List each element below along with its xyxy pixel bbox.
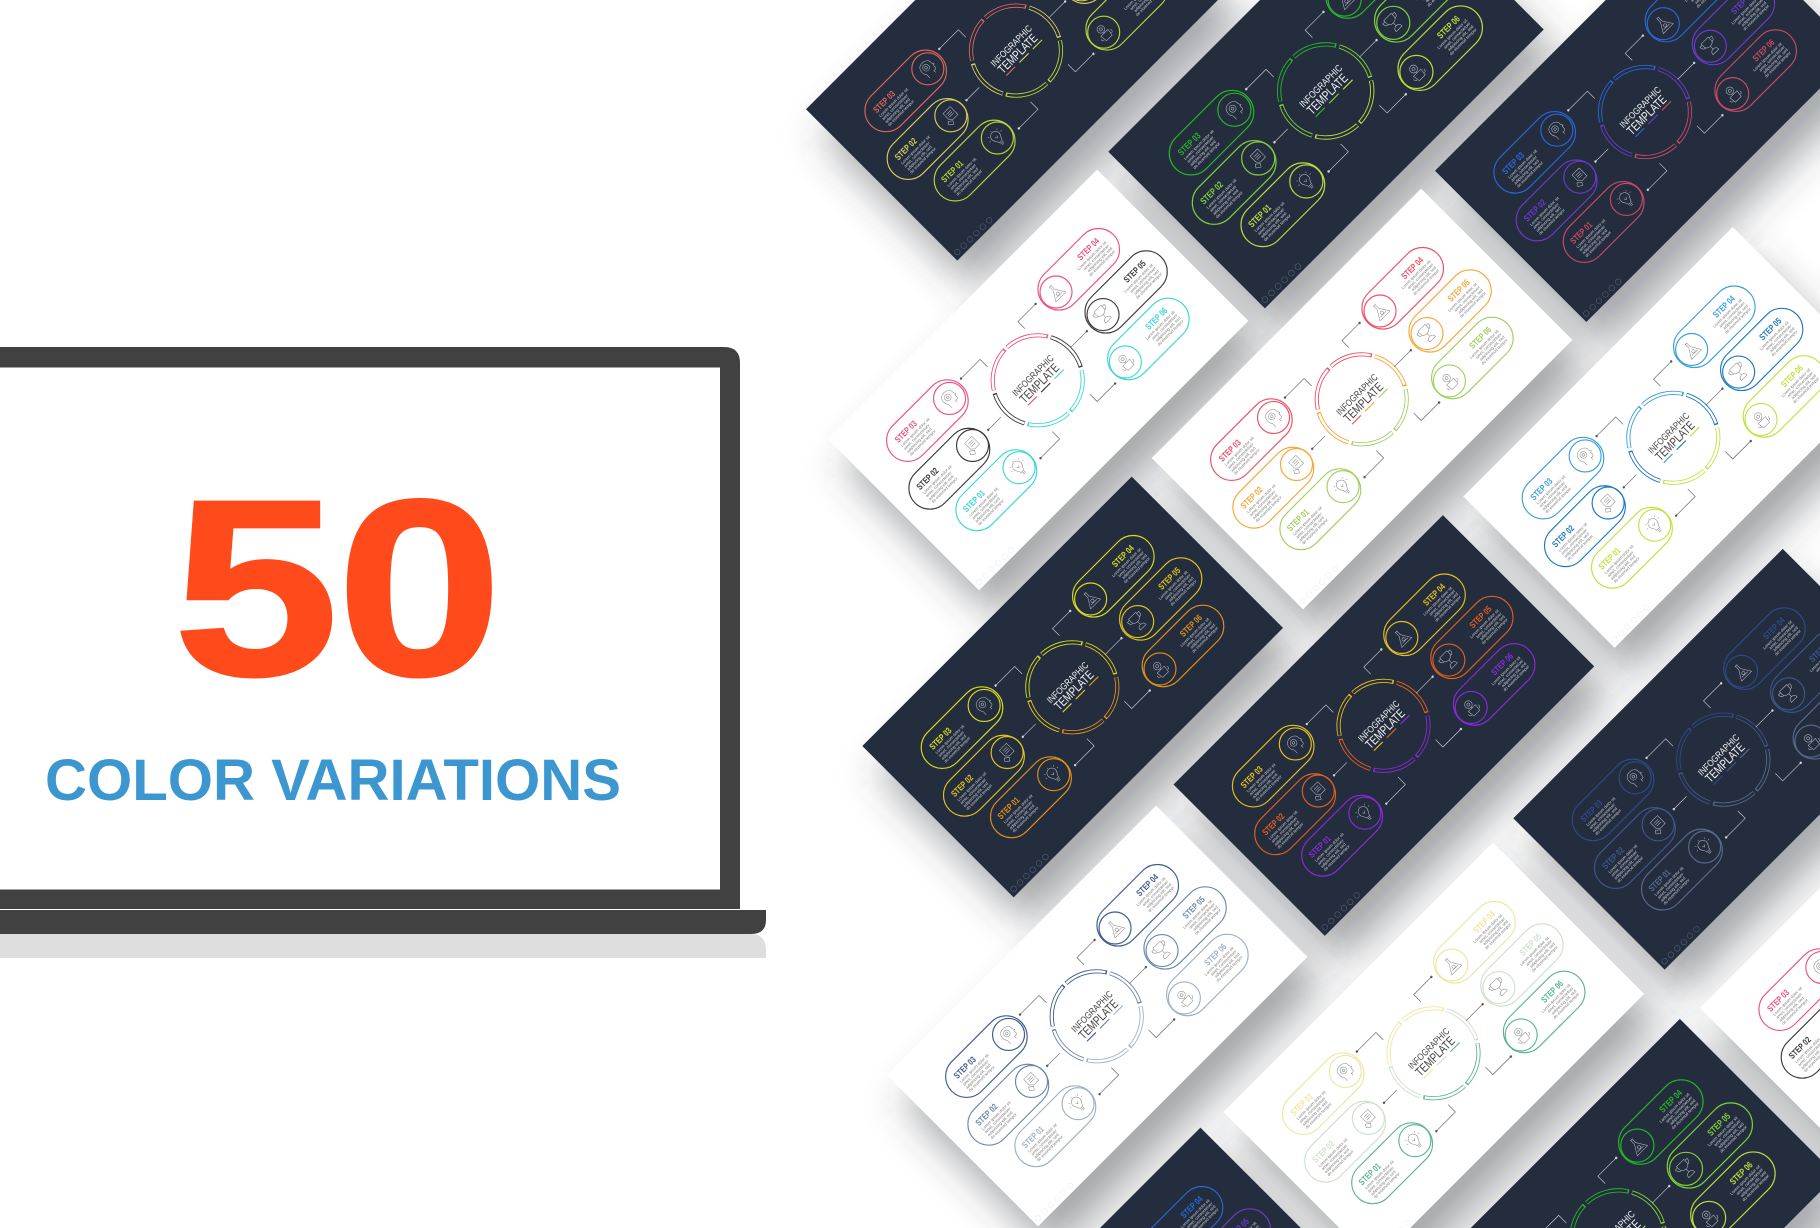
steps 04 to 06 (1637, 0, 1818, 120)
slide background (1108, 0, 1544, 308)
steps 01 to 03 (1147, 81, 1334, 269)
steps 01 to 03 (1501, 429, 1682, 610)
slide background (1700, 739, 1820, 1159)
slide: dark, amber orange purple (1174, 515, 1594, 936)
central ring with connectors (1208, 632, 1507, 931)
slide: white, red orange green (1152, 189, 1572, 609)
slide: white, navy monochrome (887, 806, 1307, 1226)
laptop base (0, 910, 766, 934)
slide: white, pale yellow teal (1224, 843, 1644, 1228)
slide background (828, 170, 1248, 590)
slide background (1513, 549, 1820, 970)
steps 04 to 06 (1064, 514, 1245, 695)
slide: white, blue lime (1463, 227, 1820, 648)
slide: dark, greens, cropped bottom (1401, 1019, 1820, 1228)
slide: dark, blue purple red (1435, 0, 1820, 322)
steps 04 to 06 (1088, 843, 1270, 1024)
slide background (1224, 843, 1644, 1228)
steps 04 to 06 (1353, 226, 1535, 407)
slide background (931, 1128, 1352, 1228)
steps 01 to 03 (1211, 717, 1392, 898)
slide: dark, red yellow lime (806, 0, 1227, 261)
steps 04 to 06 (1425, 880, 1606, 1061)
slide: dark, blue purple, cropped bottom (931, 1128, 1352, 1228)
steps 04 to 06 (1133, 1165, 1314, 1228)
central ring with connectors (1436, 1140, 1746, 1228)
steps 01 to 03 (924, 1007, 1105, 1188)
steps 01 to 03 (1440, 1227, 1627, 1228)
slide background (887, 806, 1307, 1226)
slide: dark, greens (1108, 0, 1544, 308)
steps 04 to 06 (1008, 0, 1189, 59)
central ring with connectors (921, 922, 1220, 1222)
central ring with connectors (1258, 959, 1557, 1228)
slide: dark, yellow amber orange (862, 477, 1283, 897)
steps 01 to 03 (1472, 103, 1653, 284)
laptop reflection (0, 934, 766, 958)
steps 04 to 06 (1029, 207, 1211, 388)
slide drop shadows (822, 0, 1820, 1228)
central ring with connectors (1143, 0, 1453, 304)
central ring with connectors (840, 0, 1139, 256)
central ring with connectors (1547, 666, 1820, 965)
steps 01 to 03 (900, 678, 1081, 859)
steps 04 to 06 (1317, 0, 1505, 99)
laptop (0, 347, 766, 958)
steps 01 to 03 (1261, 1044, 1442, 1225)
slide background (1174, 515, 1594, 936)
steps 01 to 03 (843, 41, 1024, 222)
central ring with connectors (862, 286, 1161, 586)
steps 04 to 06 (1375, 553, 1556, 734)
slide background (806, 0, 1227, 261)
steps 04 to 06 (1665, 265, 1820, 446)
subtitle: COLOR VARIATIONS (45, 748, 621, 813)
laptop screen bezel (0, 347, 740, 909)
central ring with connectors (896, 593, 1196, 893)
steps 01 to 03 (865, 371, 1046, 552)
slide: white, pink black cyan, cropped right (1700, 739, 1820, 1159)
slide background (1435, 0, 1820, 322)
steps 04 to 06 (1715, 586, 1820, 768)
central ring with connectors (1469, 18, 1768, 317)
headline number: 50 (173, 447, 503, 729)
central ring with connectors (1734, 855, 1820, 1155)
steps 01 to 03 (1189, 390, 1370, 571)
slide: dark, navy monochrome (1513, 549, 1820, 970)
slide background (1463, 227, 1820, 648)
steps 01 to 03 (1737, 940, 1820, 1121)
steps 01 to 03 (1551, 750, 1732, 931)
slide background (1152, 189, 1572, 609)
central ring with connectors (1497, 344, 1797, 643)
central ring with connectors (1186, 305, 1485, 605)
slide: white, pink black cyan (828, 170, 1248, 590)
slide background (1401, 1019, 1820, 1228)
slide background (862, 477, 1283, 897)
steps 04 to 06 (1610, 1058, 1797, 1228)
